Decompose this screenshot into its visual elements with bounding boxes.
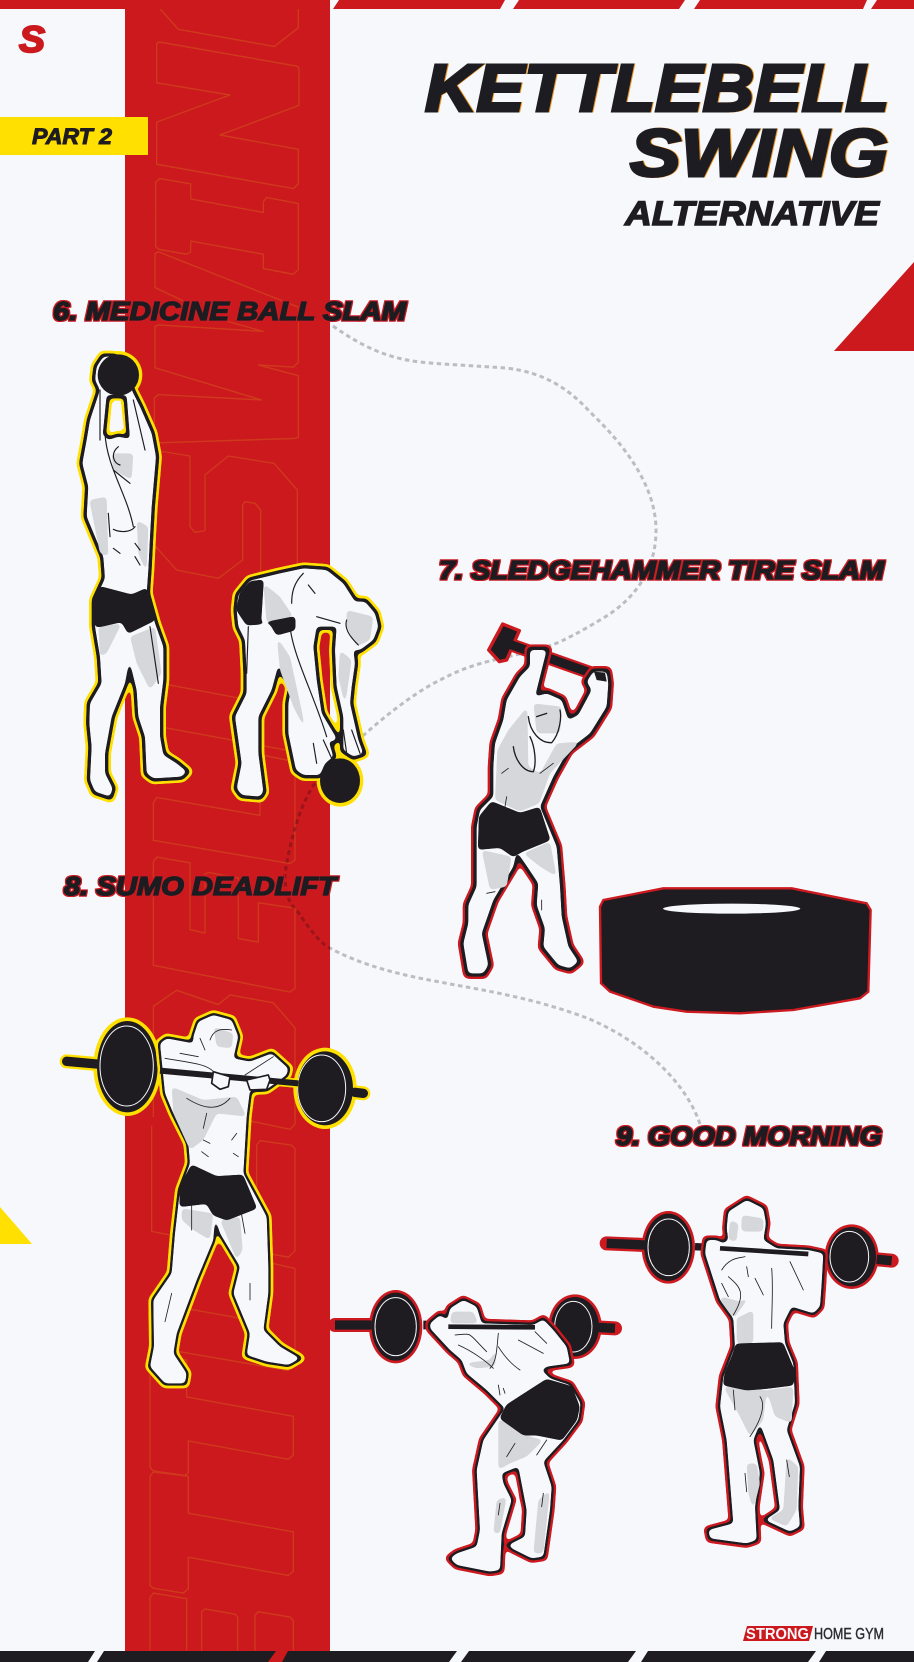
barbell <box>67 1017 363 1129</box>
figure: sledgehammer tire slam <box>463 624 871 1013</box>
corner triangle left yellow <box>0 1207 32 1244</box>
part badge: PART 2 <box>32 124 113 149</box>
bottom stripes <box>0 1651 914 1662</box>
heading: exercise 7: 7. SLEDGEHAMMER TIRE SLAM <box>439 555 885 585</box>
figure: good morning, bent over <box>335 1290 615 1572</box>
heading: exercise 8: 8. SUMO DEADLIFT <box>64 871 338 901</box>
corner triangle top right <box>834 262 914 351</box>
footer logo: HOME GYM <box>814 1626 884 1643</box>
figure: good morning, standing <box>607 1200 892 1543</box>
red vertical band with outlined lettering <box>125 0 330 1662</box>
icon: sledgehammer <box>489 624 603 677</box>
top stripes <box>0 0 914 9</box>
dashed connector path <box>285 326 700 1124</box>
logo mark S: S <box>19 19 45 60</box>
footer logo <box>743 1626 884 1643</box>
figure: sumo deadlift <box>67 1015 363 1383</box>
heading: exercise 9: 9. GOOD MORNING <box>616 1121 882 1151</box>
title: SWING <box>630 116 888 191</box>
title <box>425 51 889 233</box>
barbell <box>335 1290 615 1363</box>
title: ALTERNATIVE <box>624 195 880 233</box>
icon: tire <box>600 888 871 1013</box>
footer logo: STRONG <box>746 1626 809 1643</box>
title: KETTLEBELL <box>425 51 889 126</box>
heading: exercise 6: 6. MEDICINE BALL SLAM <box>53 296 408 326</box>
barbell <box>607 1211 892 1289</box>
figure: medicine ball slam, bent over <box>235 568 378 807</box>
part badge <box>0 117 148 155</box>
figure: medicine ball slam, standing <box>82 351 187 797</box>
